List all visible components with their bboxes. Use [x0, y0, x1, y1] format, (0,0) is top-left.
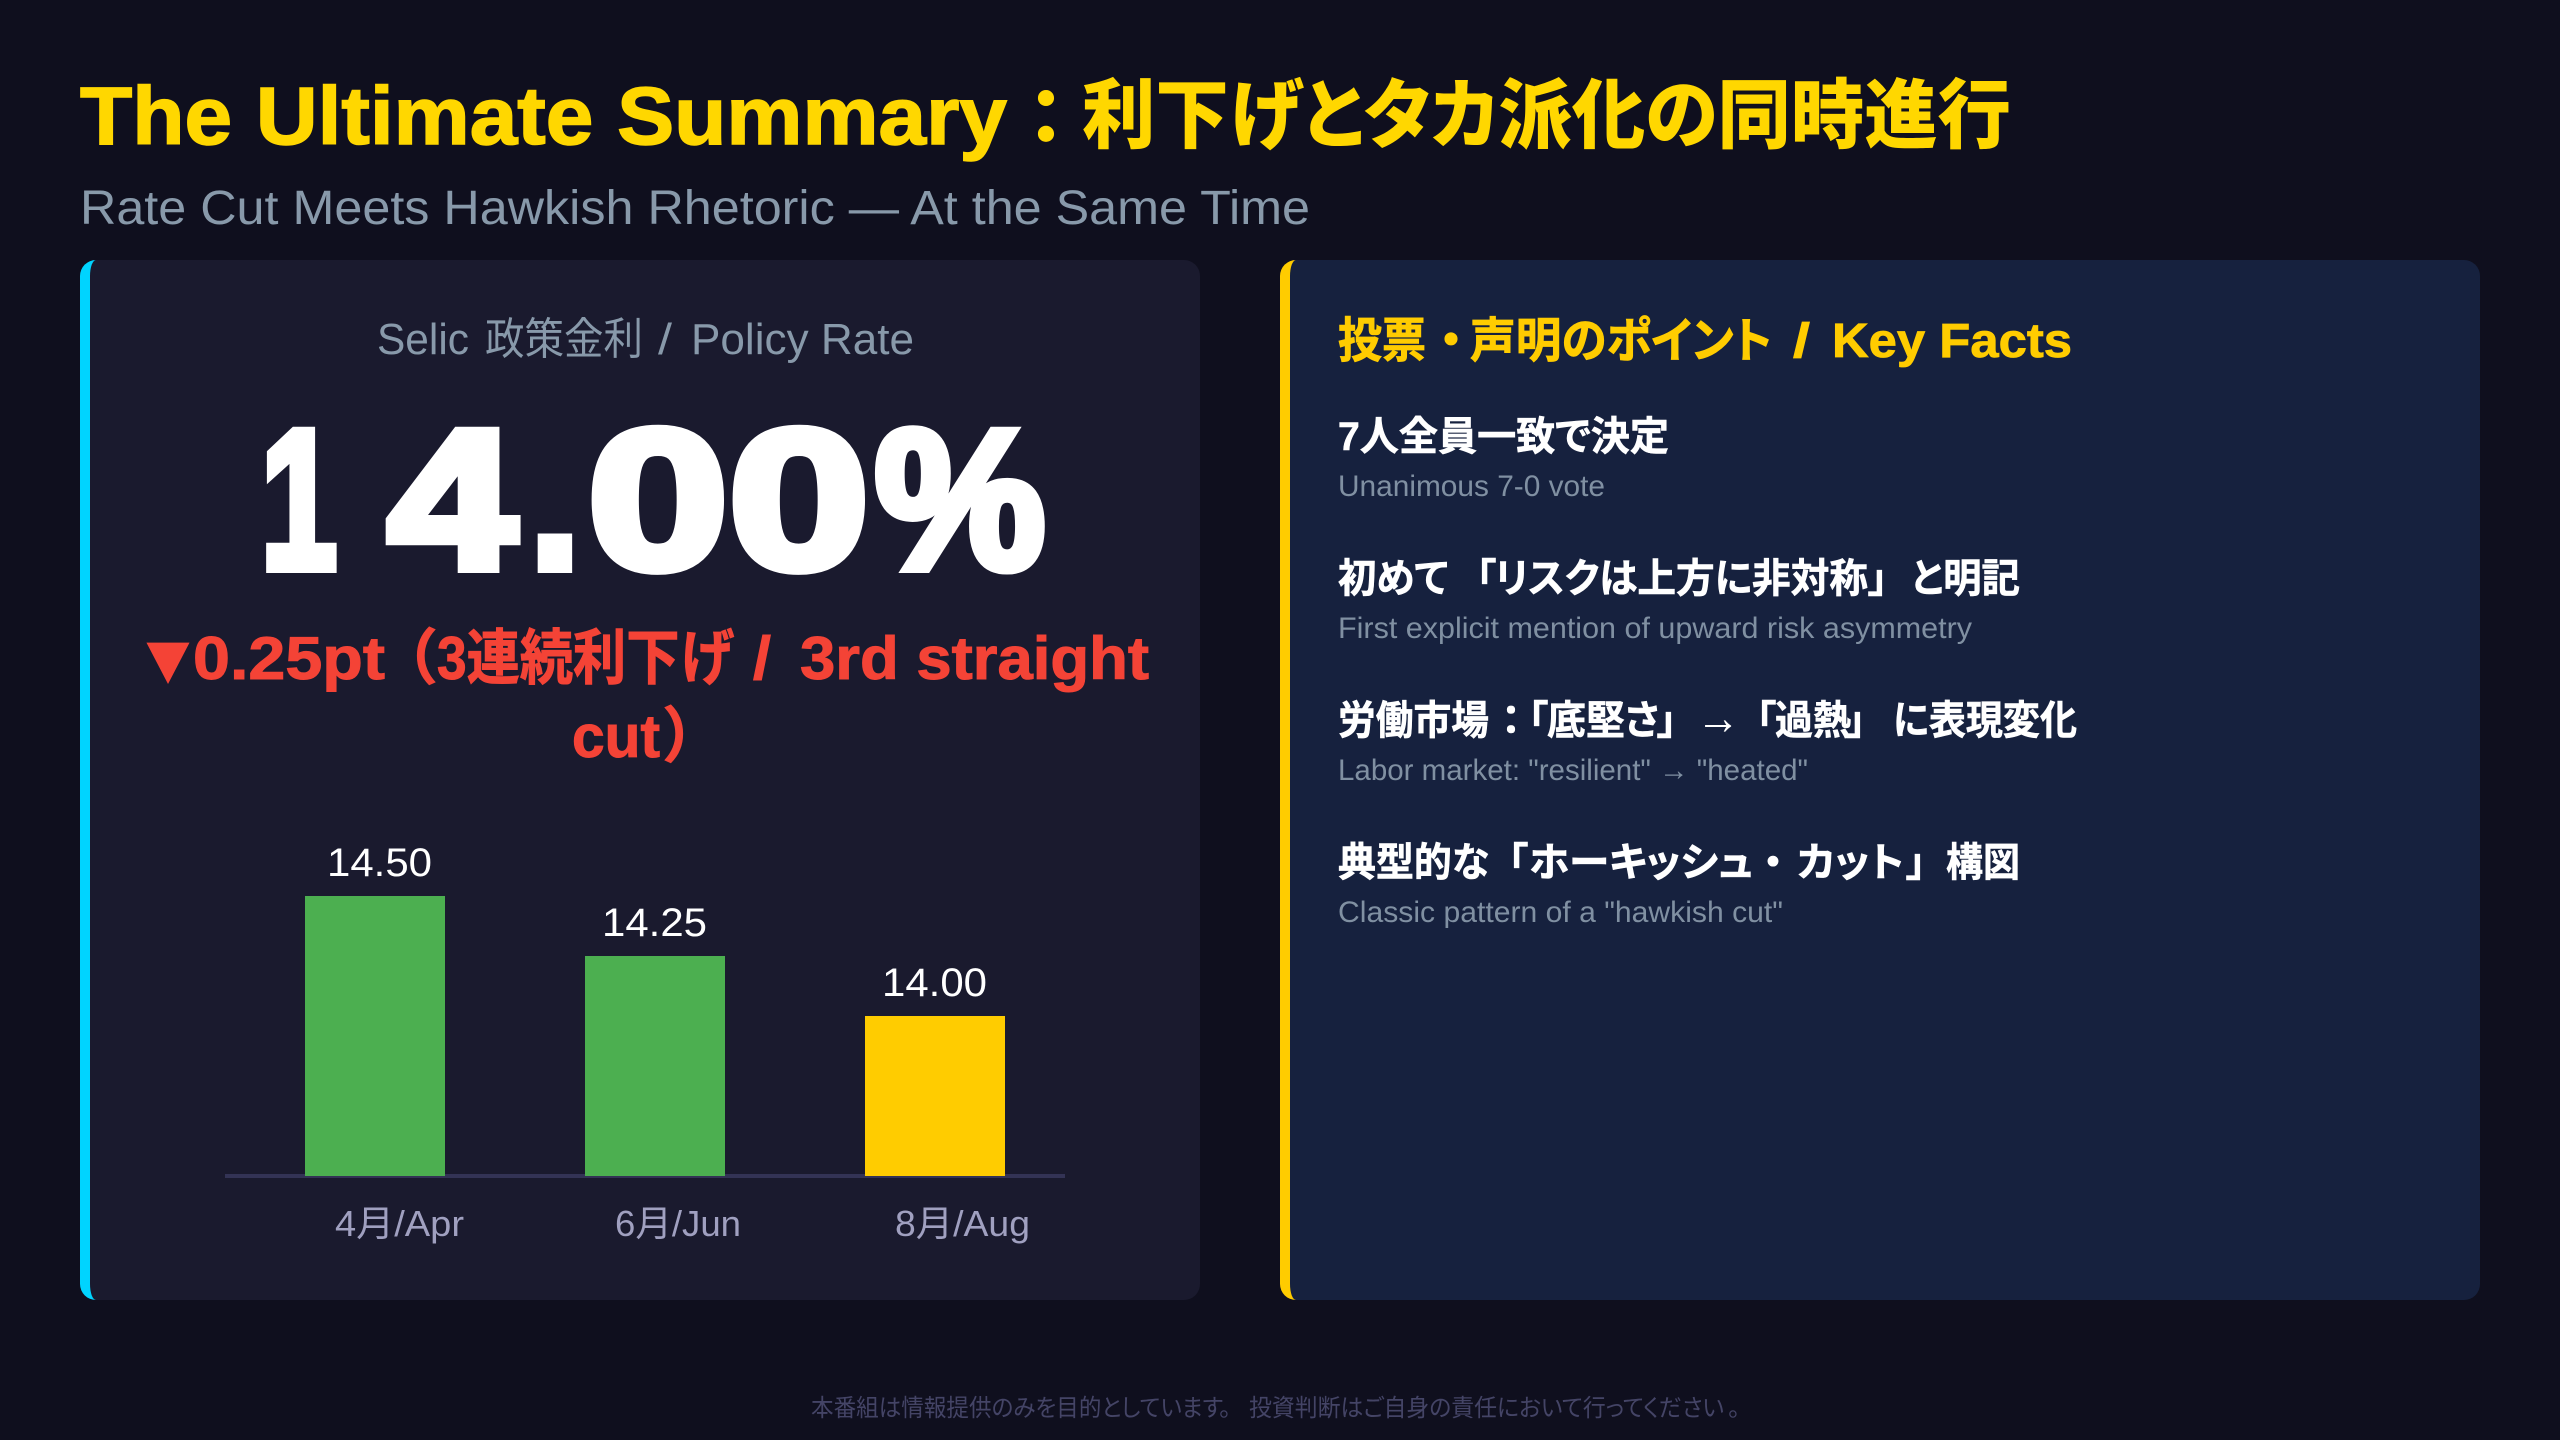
fact: upward risk asymmetry: 初めて [1338, 557, 1448, 601]
fact: upward risk asymmetry: 「 [1476, 557, 1496, 601]
rate change callout: 3連続利下げ [437, 625, 734, 692]
big rate number [261, 389, 1045, 610]
fact: hawkish cut: カット [1797, 841, 1904, 885]
fact: unanimous vote [1338, 415, 1669, 503]
fact: hawkish cut: 典型的な [1338, 841, 1489, 885]
fact: hawkish cut: 」 [1906, 841, 1926, 885]
big rate number: 1 [261, 389, 337, 610]
footer disclaimer [811, 1395, 1740, 1422]
key facts heading: 声明のポイント [1470, 315, 1772, 368]
fact: labor market wording: 過熱 [1775, 699, 1851, 743]
title: The Ultimate Summary [80, 71, 1007, 162]
fact: labor market wording: に表現変化 [1893, 699, 2077, 743]
fact: upward risk asymmetry [1338, 557, 2020, 645]
footer disclaimer: 投資判断はご自身の責任において行ってください [1249, 1395, 1724, 1422]
fact: upward risk asymmetry: リスクは上方に非対称 [1495, 557, 1868, 601]
key facts heading: 投票 [1338, 315, 1426, 368]
panel label: Selic policy rate [377, 315, 914, 364]
fact: labor market wording: 底堅さ [1547, 699, 1659, 743]
fact: labor market wording [1338, 692, 2077, 787]
rate change callout [133, 621, 1149, 770]
fact: upward risk asymmetry: 」 [1868, 557, 1888, 601]
bar: April 14.50: 14.50 [327, 841, 432, 885]
fact: labor market wording: → [1696, 692, 1740, 745]
rate change callout: 0.25pt [193, 625, 385, 692]
big rate number: . [530, 389, 580, 610]
fact: labor market wording: 労働市場 [1338, 699, 1489, 743]
bar: June 14.25: 14.25 [602, 901, 707, 945]
big rate number: 0 [729, 389, 869, 610]
footer disclaimer: 。 [1219, 1395, 1231, 1422]
fact: labor market wording: 」 [1657, 699, 1677, 743]
key facts heading: / [1793, 315, 1810, 368]
fact: upward risk asymmetry: First explicit mention of upward risk asymmetry [1338, 612, 1972, 645]
fact: hawkish cut: ホーキッシュ [1529, 841, 1753, 885]
rate change callout: 3rd straight [800, 625, 1149, 692]
bar: April 14.50: 4月/Apr [335, 1203, 464, 1244]
fact: hawkish cut [1338, 841, 2020, 929]
fact: hawkish cut: 「 [1508, 841, 1528, 885]
fact: labor market wording: 」 [1846, 699, 1866, 743]
bar: June 14.25 [585, 901, 741, 1244]
panel: key facts [1280, 260, 2480, 1300]
bar: August 14.00: 8月/Aug [895, 1203, 1030, 1244]
fact: hawkish cut: 構図 [1946, 841, 2020, 885]
panel label: Selic policy rate: / [658, 315, 673, 364]
key facts heading: ・ [1439, 315, 1463, 368]
panel label: Selic policy rate: Policy Rate [691, 315, 914, 364]
fact: hawkish cut: ・ [1763, 841, 1783, 885]
title: 利下げとタカ派化の同時進行 [1082, 74, 2011, 159]
bar: August 14.00: 14.00 [882, 961, 987, 1005]
bar chart: policy rate history [225, 841, 1065, 1244]
footer disclaimer: 。 [1728, 1395, 1740, 1422]
fact: labor market wording: 「 [1528, 699, 1548, 743]
fact: unanimous vote: Unanimous 7-0 vote [1338, 470, 1605, 503]
rate change callout: / [753, 625, 771, 692]
rate change callout: ▼ [133, 621, 203, 697]
fact: labor market wording: 「 [1756, 699, 1776, 743]
bar: April 14.50 [305, 841, 464, 1244]
bar: June 14.25: 6月/Jun [615, 1203, 741, 1244]
big rate number: 4 [388, 389, 516, 610]
panel: policy rate [80, 260, 1200, 1300]
panel label: Selic policy rate: 政策金利 [485, 315, 643, 364]
title [80, 71, 2011, 162]
big rate number: 0 [588, 389, 728, 610]
footer disclaimer: 本番組は情報提供のみを目的としています [811, 1395, 1223, 1422]
fact: labor market wording: ： [1501, 699, 1521, 743]
bar: August 14.00 [865, 961, 1030, 1244]
fact: labor market wording: Labor market: "resilient" → "heated" [1338, 754, 1808, 787]
fact: unanimous vote: 7人全員一致で決定 [1338, 415, 1669, 459]
fact: hawkish cut: Classic pattern of a "hawkish cut" [1338, 896, 1783, 929]
big rate number: % [875, 389, 1045, 610]
rate change callout: ） [664, 703, 695, 770]
fact: upward risk asymmetry: と明記 [1911, 557, 2020, 601]
key facts heading [1338, 315, 2072, 368]
title: ： [1027, 76, 1065, 161]
panel label: Selic policy rate: Selic [377, 315, 469, 364]
rate change callout: （ [405, 625, 436, 692]
key facts heading: Key Facts [1832, 315, 2072, 368]
subtitle: Rate Cut Meets Hawkish Rhetoric — At the Same Time [80, 182, 1310, 235]
rate change callout: cut [572, 703, 660, 770]
